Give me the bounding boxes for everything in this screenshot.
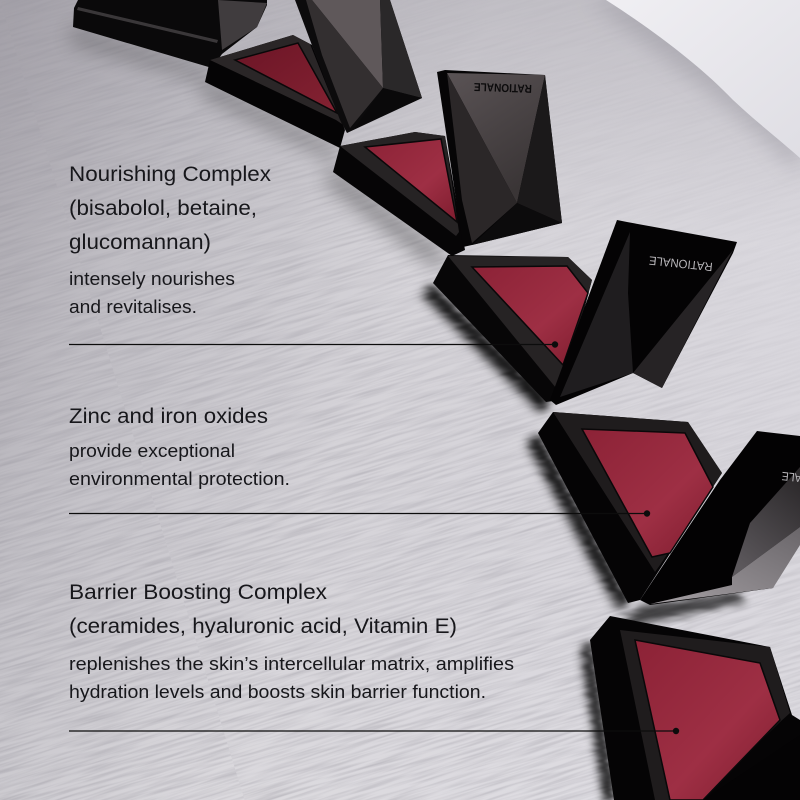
description: intensely nourishes bbox=[69, 268, 235, 289]
text block: barrier boosting complex bbox=[69, 580, 514, 702]
heading: Nourishing Complex bbox=[69, 162, 271, 186]
heading: Barrier Boosting Complex bbox=[69, 580, 327, 604]
text block: barrier boosting complex: hydration levels and boosts skin barrier function. bbox=[69, 681, 486, 702]
text block: nourishing complex: and revitalises. bbox=[69, 296, 197, 317]
compact 6 lid bbox=[703, 735, 800, 800]
text block: zinc and iron oxides: environmental protection. bbox=[69, 468, 290, 489]
compact 6 blush pan bbox=[635, 640, 780, 800]
compact 2 lid bbox=[295, 0, 422, 133]
compact 5 blush pan bbox=[582, 429, 713, 557]
compact 2: pan and lid bbox=[205, 0, 422, 148]
compact 5 lid bbox=[640, 431, 800, 605]
description: replenishes the skin’s intercellular matrix, amplifies bbox=[69, 653, 514, 674]
compact 2 blush pan bbox=[235, 43, 337, 113]
text block: nourishing complex: glucomannan) bbox=[69, 230, 211, 254]
callout line: barrier boosting complex bbox=[69, 728, 679, 734]
compact 5 base bbox=[538, 412, 722, 603]
compact 5: pan and lid bbox=[538, 412, 800, 605]
text block: nourishing complex: (bisabolol, betaine, bbox=[69, 196, 257, 220]
compact 4: pan and lid bbox=[433, 220, 737, 405]
lid logo: RATIONALE bbox=[648, 253, 713, 274]
compact 6: pan and lid bbox=[590, 616, 800, 800]
compact 4 blush pan bbox=[472, 266, 588, 365]
compact 6 base bbox=[590, 616, 800, 800]
text block: zinc and iron oxides bbox=[69, 404, 290, 489]
heading: Zinc and iron oxides bbox=[69, 404, 268, 428]
callout line: zinc and iron oxides bbox=[69, 510, 650, 517]
compact 3 blush pan bbox=[365, 139, 457, 222]
background: pale cloth top right bbox=[590, 0, 800, 175]
compact 1: closed, top left bbox=[73, 0, 267, 68]
compact 3: pan and lid bbox=[333, 70, 562, 256]
text block: nourishing complex bbox=[69, 162, 271, 317]
compact 4 lid bbox=[550, 220, 737, 405]
description: provide exceptional bbox=[69, 440, 235, 461]
compact 2 base bbox=[205, 35, 345, 148]
callout line: nourishing complex bbox=[69, 341, 558, 348]
text block: barrier boosting complex: (ceramides, hyaluronic acid, Vitamin E) bbox=[69, 614, 457, 638]
compact 3 lid bbox=[437, 70, 562, 247]
compact 3 base bbox=[333, 132, 465, 256]
compact 4 base bbox=[433, 255, 592, 402]
lid logo: RATIONALE bbox=[473, 80, 532, 94]
